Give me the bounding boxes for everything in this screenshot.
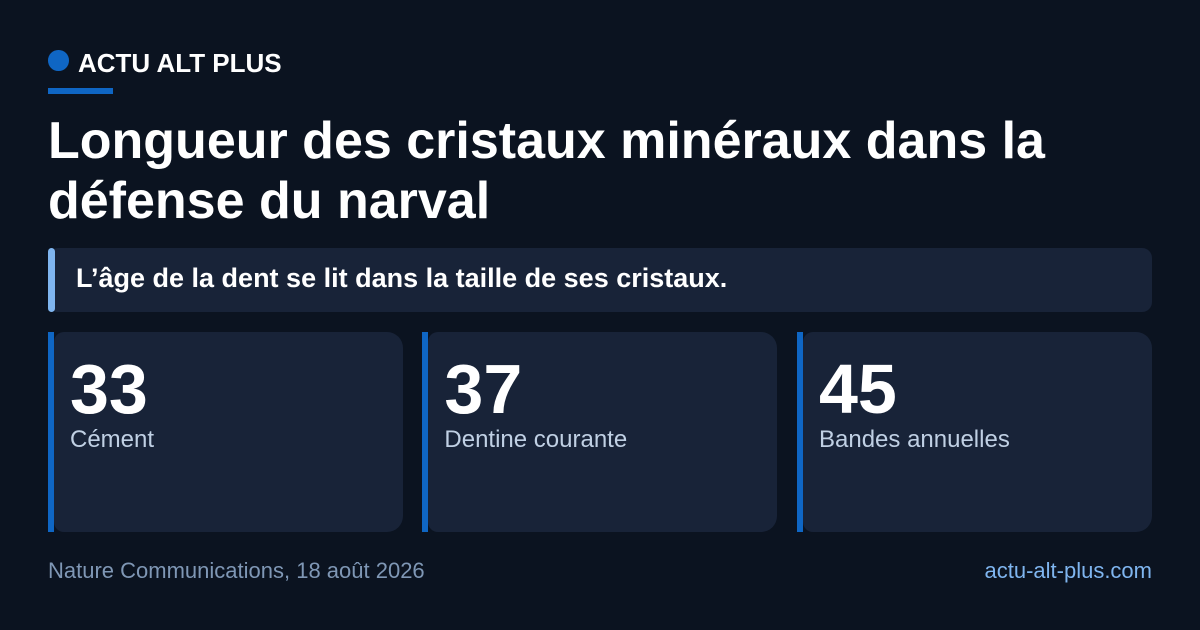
callout text: L’âge de la dent se lit dans la taille de ses cristaux.	[76, 263, 727, 293]
stat label: Cément	[70, 426, 154, 453]
brand underline	[48, 88, 112, 94]
stat label: Dentine courante	[444, 426, 627, 453]
brand name: ACTU ALT PLUS	[78, 48, 282, 78]
stat value: 45	[819, 350, 897, 428]
stat value: 37	[444, 350, 522, 428]
panel: stat Dentine courante	[422, 332, 777, 532]
stat value: 33	[70, 350, 148, 428]
stat label: Bandes annuelles	[819, 426, 1010, 453]
site link: actu-alt-plus.com	[984, 558, 1152, 583]
panel: stat Bandes annuelles	[797, 332, 1152, 532]
brand header	[48, 48, 282, 94]
panel: stat Cément	[48, 332, 403, 532]
title	[48, 112, 1046, 230]
callout accent bar	[48, 248, 55, 312]
title: défense du narval	[48, 172, 490, 230]
panel: key message callout	[48, 248, 1152, 312]
source footer: Nature Communications, 18 août 2026	[48, 558, 425, 583]
icon: brand dot	[48, 50, 68, 70]
title: Longueur des cristaux minéraux dans la	[48, 112, 1045, 170]
